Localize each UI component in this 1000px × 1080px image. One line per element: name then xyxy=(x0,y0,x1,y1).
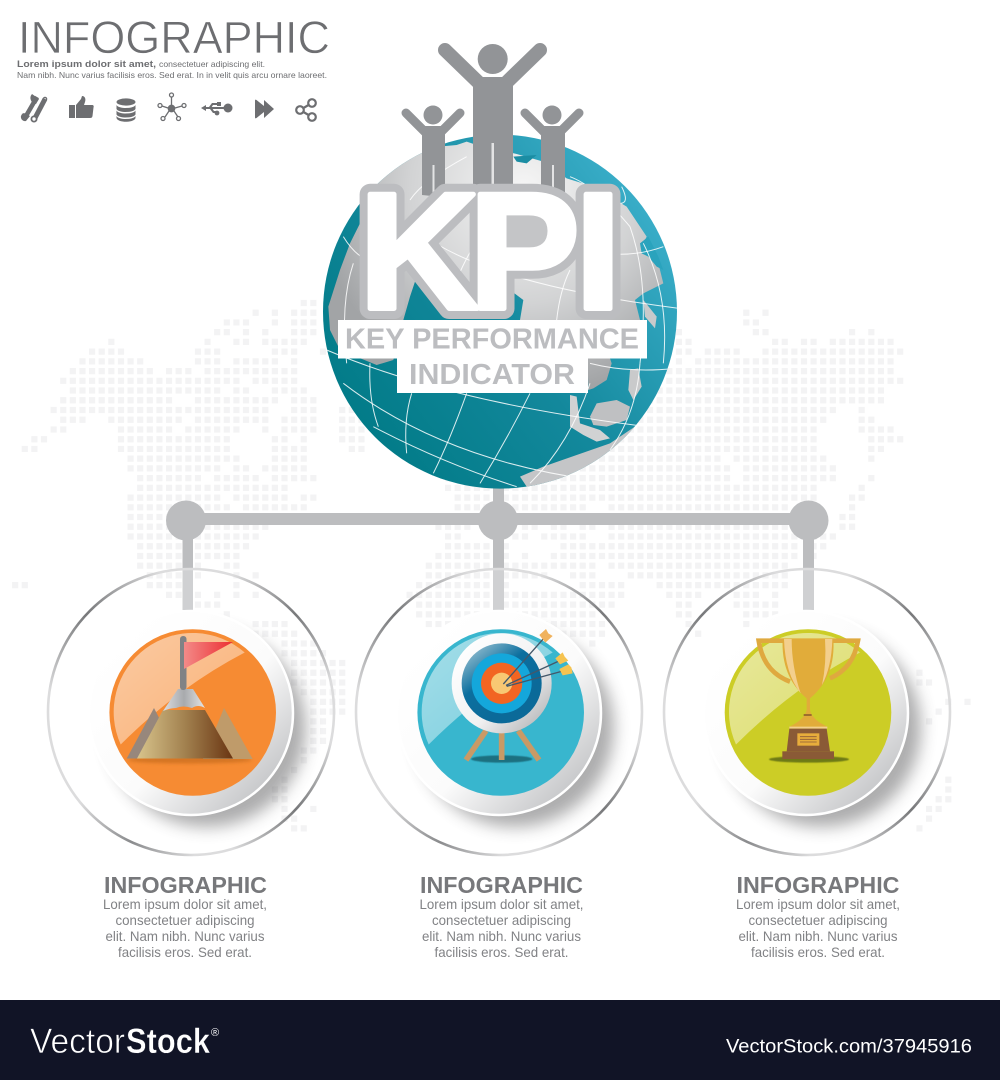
icon: tools xyxy=(21,94,47,122)
body xyxy=(420,897,584,960)
icon: fast forward xyxy=(255,100,274,118)
letters outline xyxy=(359,160,621,344)
body: facilisis eros. Sed erat. xyxy=(118,945,252,960)
icon: trophy xyxy=(759,638,858,763)
colour circle xyxy=(109,629,276,796)
letters fill: K xyxy=(359,160,479,344)
text block: column 3 xyxy=(736,872,900,960)
ring xyxy=(356,569,642,855)
body: Lorem ipsum dolor sit amet, xyxy=(736,897,900,912)
body xyxy=(103,897,267,960)
logo: Vector xyxy=(30,1022,125,1061)
panel: trophy xyxy=(664,569,950,855)
letters outline: I xyxy=(575,160,621,344)
letters outline: K xyxy=(359,160,479,344)
icon: share xyxy=(296,99,316,121)
footer bar xyxy=(0,1000,1000,1080)
gloss xyxy=(729,633,860,744)
dotted world map xyxy=(12,303,971,828)
header: infographic title and icons xyxy=(17,12,330,122)
icon: usb xyxy=(201,102,232,115)
heading: INFOGRAPHIC xyxy=(104,872,267,898)
body: Lorem ipsum dolor sit amet, xyxy=(103,897,267,912)
intro text: Nam nibh. Nunc varius facilisis eros. Sed erat. In in velit quis arcu ornare laoreet. xyxy=(17,70,327,80)
letters outline: P xyxy=(469,160,580,344)
disc xyxy=(89,611,306,827)
letters fill xyxy=(359,160,621,344)
heading: INFOGRAPHIC xyxy=(736,872,900,898)
body: elit. Nam nibh. Nunc varius xyxy=(738,929,898,944)
body: facilisis eros. Sed erat. xyxy=(434,945,568,960)
icon: target with arrows xyxy=(452,629,573,763)
logo: Stock xyxy=(126,1022,210,1061)
person: left xyxy=(406,106,460,196)
body: consectetuer adipiscing xyxy=(432,913,571,928)
KPI subtitle banner: KEY PERFORMANCE xyxy=(345,324,639,356)
intro text: consectetuer adipiscing elit. xyxy=(159,59,265,69)
body: consectetuer adipiscing xyxy=(748,913,888,928)
logo xyxy=(30,1022,219,1061)
body: facilisis eros. Sed erat. xyxy=(751,945,885,960)
panel: goal mountain xyxy=(48,569,334,855)
KPI subtitle banner: INDICATOR xyxy=(409,359,575,391)
icon: mountain with flag xyxy=(127,636,253,764)
disc xyxy=(704,611,921,827)
icon: database xyxy=(116,98,136,122)
person: centre xyxy=(445,44,540,185)
gloss xyxy=(114,633,245,744)
body: elit. Nam nibh. Nunc varius xyxy=(422,929,581,944)
ring xyxy=(664,569,950,855)
image id: VectorStock.com/37945916 xyxy=(726,1036,972,1058)
body: consectetuer adipiscing xyxy=(116,913,254,928)
icon: thumbs up xyxy=(69,96,94,118)
colour circle xyxy=(417,629,584,796)
disc xyxy=(397,611,614,827)
globe xyxy=(323,135,678,489)
body: elit. Nam nibh. Nunc varius xyxy=(106,929,265,944)
heading: INFOGRAPHIC xyxy=(420,872,583,898)
body xyxy=(736,897,900,960)
title: INFOGRAPHIC xyxy=(18,12,330,63)
gloss xyxy=(422,633,553,744)
intro text: Lorem ipsum dolor sit amet, xyxy=(17,59,156,69)
connector lines and nodes xyxy=(166,485,828,610)
body: Lorem ipsum dolor sit amet, xyxy=(420,897,584,912)
ring xyxy=(48,569,334,855)
colour circle xyxy=(725,629,891,796)
letters fill: I xyxy=(575,160,621,344)
panel: target xyxy=(356,569,642,855)
graticule xyxy=(327,157,678,487)
person: right xyxy=(525,106,579,195)
continents xyxy=(328,142,663,390)
logo: ® xyxy=(211,1027,219,1039)
letters fill: P xyxy=(469,160,580,344)
icon: network xyxy=(158,93,186,120)
people figures xyxy=(406,44,579,196)
text block: column 2 xyxy=(420,872,584,960)
KPI letters xyxy=(359,160,621,344)
text block: column 1 xyxy=(103,872,267,960)
KPI subtitle banner xyxy=(338,320,647,393)
intro text xyxy=(17,59,327,80)
